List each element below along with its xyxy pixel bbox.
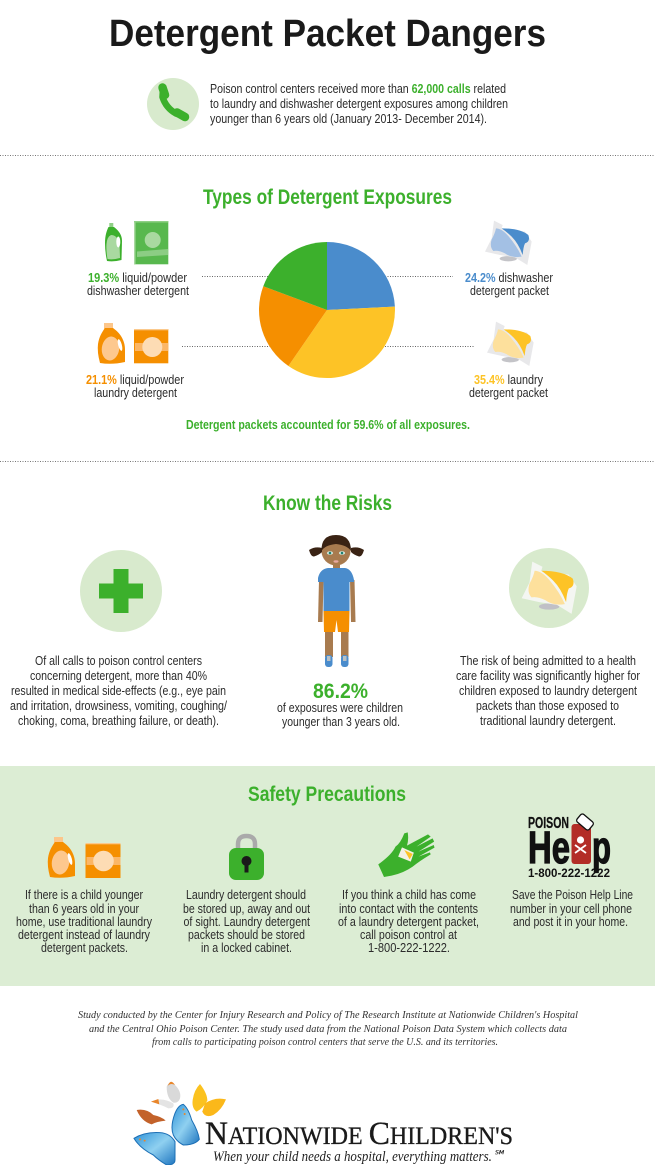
text: store locked: Laundry detergent should xyxy=(186,888,306,902)
label: 19.3% liquid/powder dishwasher detergent: 19.3% liquid/powder xyxy=(88,271,187,285)
text: use traditional detergent: than 6 years old in your xyxy=(29,902,139,916)
label: 24.2% dishwasher detergent packet: detergent packet xyxy=(470,284,549,298)
text: save the number xyxy=(510,888,633,929)
footnote: and the Central Ohio Poison Center. The study used data from the National Poison Data System which collects data xyxy=(89,1024,567,1035)
label: 24.2% dishwasher detergent packet: 24.2% dishwasher xyxy=(465,271,553,285)
pie chart xyxy=(259,242,395,378)
icon: orange powder box xyxy=(134,329,168,363)
text: call poison control xyxy=(338,888,479,955)
label: 21.1% liquid/powder laundry detergent: laundry detergent xyxy=(94,386,177,400)
text: admission risk: packets than those exposed to xyxy=(476,699,619,713)
label: 19.3% liquid/powder dishwasher detergent xyxy=(87,271,189,298)
icon: orange bottle and box xyxy=(48,837,120,878)
icon: green powder box xyxy=(134,221,168,264)
logo: nationwide children's wordmark: NATIONWIDE CHILDREN'S xyxy=(205,1116,513,1152)
stat: 86.2% xyxy=(277,680,403,729)
logo: poison help: POISON xyxy=(528,815,569,832)
footnote: from calls to participating poison control centers that serve the U.S. and its territories. xyxy=(152,1037,498,1048)
text: save the number: and post it in your home. xyxy=(513,915,628,929)
text: store locked xyxy=(183,888,310,955)
text: call poison control: If you think a child has come xyxy=(342,888,476,902)
footnote: Study conducted by the Center for Injury Research and Policy of The Research Institute at Nationwide Children's Hospital xyxy=(78,1010,578,1021)
text: save the number: Save the Poison Help Line xyxy=(512,888,633,902)
text: medical side-effects xyxy=(10,654,227,728)
icon: orange bottle xyxy=(98,323,125,364)
icon: yellow packet xyxy=(487,322,534,366)
text: store locked: be stored up, away and out xyxy=(183,902,310,916)
logo: poison help: p xyxy=(592,822,611,873)
text: store locked: in a locked cabinet. xyxy=(201,941,292,955)
text: store locked: of sight. Laundry detergent xyxy=(184,915,310,929)
text: admission risk xyxy=(456,654,640,728)
text: save the number: number in your cell phone xyxy=(510,902,632,916)
callout: packets share: Detergent packets accounted for 59.6% of all exposures. xyxy=(186,418,470,432)
stat: 86.2%: of exposures were children xyxy=(277,701,403,715)
logo: butterflies xyxy=(134,1082,226,1165)
label: 24.2% dishwasher detergent packet xyxy=(465,271,553,298)
label: 21.1% liquid/powder laundry detergent: 21.1% liquid/powder xyxy=(86,373,184,387)
icon: phone xyxy=(147,78,199,130)
label: 19.3% liquid/powder dishwasher detergent: dishwasher detergent xyxy=(87,284,189,298)
icon: packet in circle xyxy=(509,548,589,628)
text: use traditional detergent: detergent instead of laundry xyxy=(18,928,151,942)
label: 21.1% liquid/powder laundry detergent xyxy=(86,373,184,400)
logo: poison help xyxy=(528,813,611,880)
logo: poison help: He xyxy=(528,822,570,873)
heading: know the risks: Know the Risks xyxy=(263,492,392,515)
icon: green bottle xyxy=(105,223,122,261)
logo: poison help: 1-800-222-1222 xyxy=(528,866,610,880)
text: medical side-effects: choking, coma, breathing failure, or death). xyxy=(18,714,219,728)
intro text: younger than 6 years old (January 2013- December 2014). xyxy=(210,112,487,126)
text: medical side-effects: concerning detergent, more than 40% xyxy=(30,669,207,683)
icon: child xyxy=(309,535,364,667)
logo: tagline: When your child needs a hospital, everything matters.℠ xyxy=(213,1149,505,1165)
text: call poison control: into contact with the contents xyxy=(339,902,478,916)
heading: types of detergent exposures: Types of Detergent Exposures xyxy=(203,186,452,209)
text: use traditional detergent: detergent packets. xyxy=(41,941,128,955)
intro text xyxy=(210,82,508,126)
text: call poison control: call poison control at xyxy=(360,928,457,942)
text: use traditional detergent: If there is a child younger xyxy=(25,888,143,902)
text: use traditional detergent: home, use traditional laundry xyxy=(16,915,153,929)
text: call poison control: of a laundry detergent packet, xyxy=(338,915,479,929)
title: Detergent Packet Dangers xyxy=(109,13,546,55)
text: store locked: packets should be stored xyxy=(188,928,305,942)
stat: 86.2%: 86.2% xyxy=(313,680,368,703)
heading: safety precautions: Safety Precautions xyxy=(248,783,406,806)
text: admission risk: traditional laundry detergent. xyxy=(480,714,616,728)
label: 35.4% laundry detergent packet: detergent packet xyxy=(469,386,548,400)
panel: safety precautions xyxy=(0,766,655,986)
icon: blue packet xyxy=(485,221,532,265)
footnote xyxy=(78,1010,578,1048)
text: medical side-effects: Of all calls to poison control centers xyxy=(35,654,202,668)
text: medical side-effects: and irritation, drowsiness, vomiting, coughing/ xyxy=(10,699,227,713)
icon: medical cross xyxy=(80,550,162,632)
label: 35.4% laundry detergent packet: 35.4% laundry xyxy=(474,373,544,387)
text: call poison control: 1-800-222-1222. xyxy=(368,941,450,955)
text: medical side-effects: resulted in medical side-effects (e.g., eye pain xyxy=(11,684,226,698)
icon: padlock xyxy=(229,836,264,880)
stat: 86.2%: younger than 3 years old. xyxy=(282,715,400,729)
label: 35.4% laundry detergent packet xyxy=(469,373,548,400)
text: use traditional detergent xyxy=(16,888,153,955)
intro text: Poison control centers received more than 62,000 calls related xyxy=(210,82,506,96)
icon: gloved hand with packet xyxy=(378,832,435,877)
intro text: to laundry and dishwasher detergent exposures among children xyxy=(210,97,508,111)
